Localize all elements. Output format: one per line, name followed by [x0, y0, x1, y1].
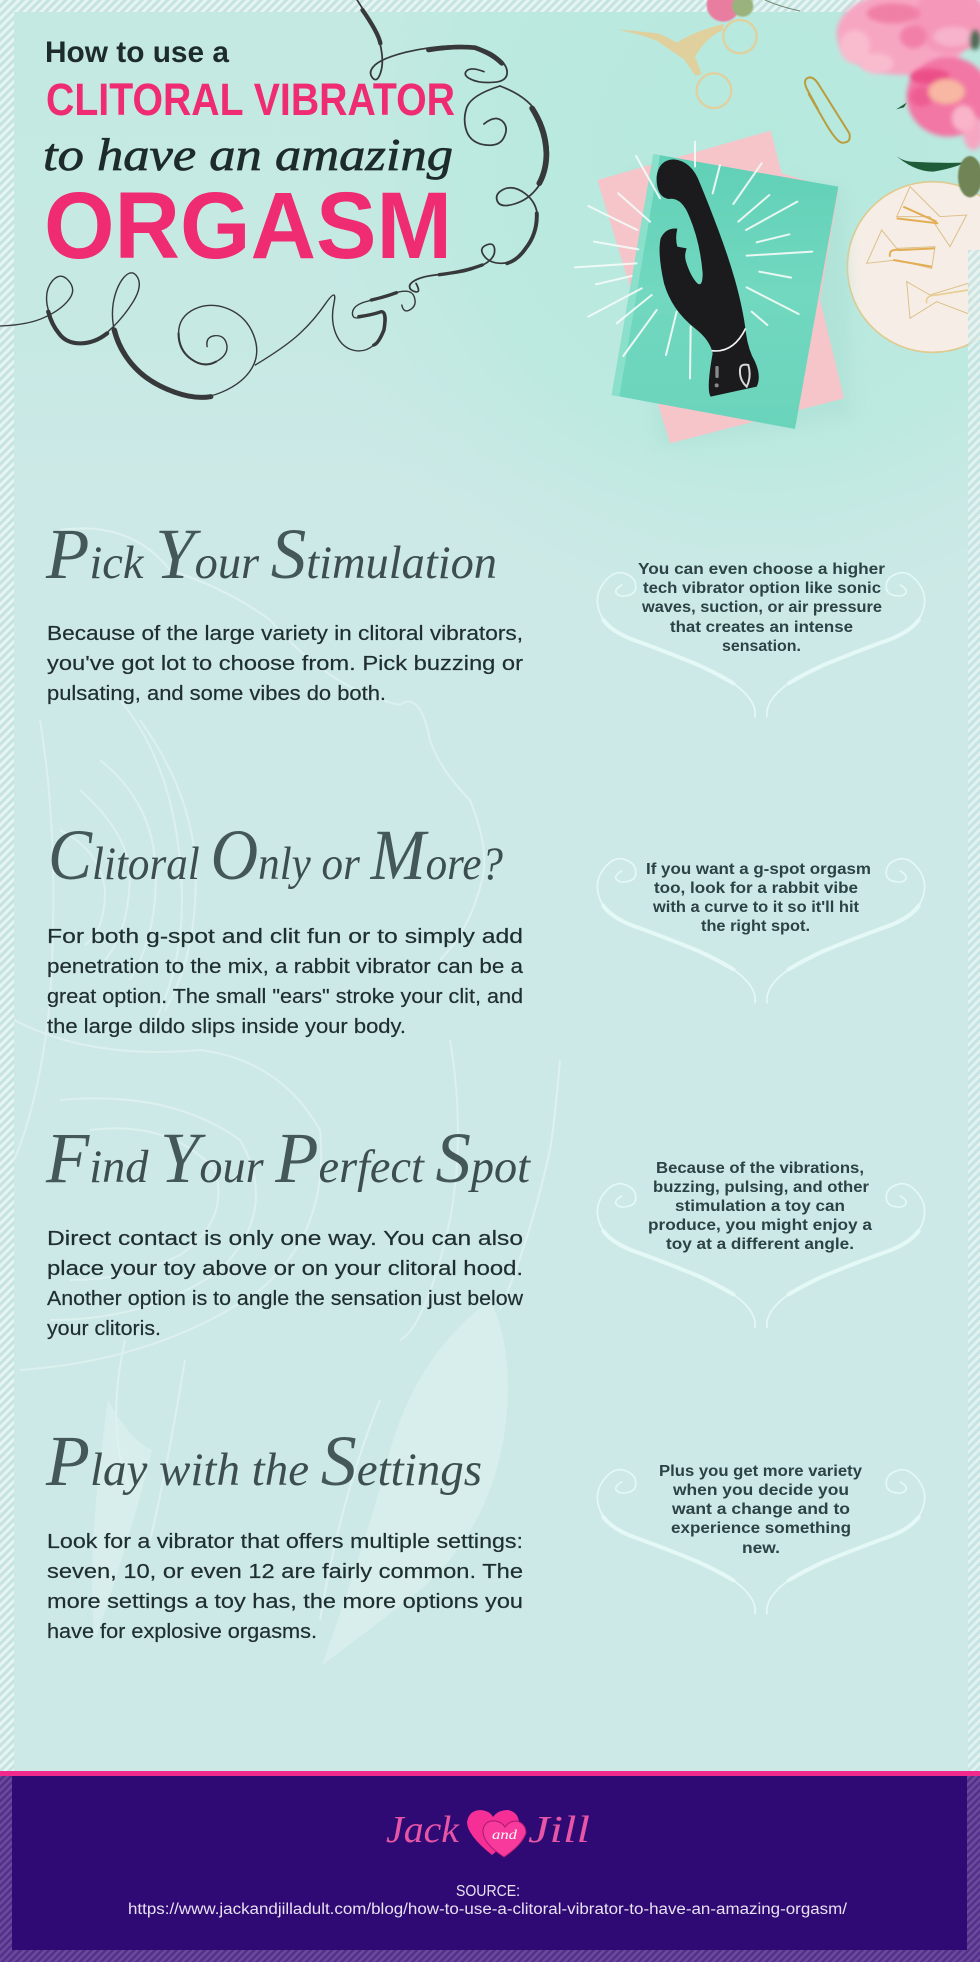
callout 2	[597, 859, 925, 1003]
body text: place your toy above or on your clitoral hood.	[47, 1258, 523, 1280]
body text: Because of the large variety in clitoral vibrators,	[47, 623, 523, 645]
logo hearts	[467, 1810, 519, 1855]
callout text: toy at a different angle.	[666, 1236, 854, 1253]
body text: penetration to the mix, a rabbit vibrator can be a	[47, 956, 524, 978]
section 2: clitoral only or more	[47, 815, 524, 1038]
callout text: too, look for a rabbit vibe	[654, 880, 858, 897]
body text: Direct contact is only one way. You can also	[47, 1228, 523, 1250]
callout text: stimulation a toy can	[675, 1198, 845, 1215]
heart swirl	[597, 1470, 925, 1614]
callout text: new.	[742, 1540, 780, 1557]
body text	[47, 926, 524, 1038]
source url: https://www.jackandjilladult.com/blog/how-to-use-a-clitoral-vibrator-to-have-an-amazing-orgasm/	[128, 1901, 848, 1918]
scissors	[617, 20, 757, 108]
section 3: find your perfect spot	[45, 1118, 531, 1340]
body text	[47, 1228, 524, 1340]
callout text: experience something	[671, 1520, 851, 1537]
body text: more settings a toy has, the more options you	[47, 1591, 523, 1613]
book soft shadow	[627, 167, 853, 447]
body text: the large dildo slips inside your body.	[47, 1016, 406, 1038]
callout text: when you decide you	[672, 1482, 849, 1499]
teal notebook	[612, 154, 838, 429]
title swirl flourish	[0, 0, 548, 397]
heading: Play with the Settings	[45, 1421, 482, 1501]
paper clip	[805, 77, 850, 143]
logo: jack and jill: Jack	[386, 1809, 460, 1851]
decorative hatch borders	[0, 0, 980, 12]
callout text: the right spot.	[701, 918, 810, 935]
flower bud top	[707, 0, 800, 22]
body text: great option. The small "ears" stroke your clit, and	[47, 986, 523, 1008]
callout text	[648, 1160, 872, 1253]
callout text	[638, 561, 885, 655]
plate with binder clips	[847, 182, 980, 352]
pink notebook	[597, 131, 844, 443]
binder clips	[867, 187, 972, 318]
heart swirl	[597, 859, 925, 1003]
callout text	[646, 861, 871, 935]
body text: Look for a vibrator that offers multiple settings:	[47, 1531, 523, 1553]
callout text: produce, you might enjoy a	[648, 1217, 872, 1234]
title	[43, 36, 455, 279]
callout text: tech vibrator option like sonic	[643, 580, 881, 597]
heart swirl	[597, 573, 925, 717]
source label: SOURCE:	[456, 1883, 520, 1900]
watermark leg shapes	[92, 1300, 508, 1665]
body text: have for explosive orgasms.	[47, 1621, 317, 1643]
logo: jack and jill	[386, 1809, 590, 1857]
callout text: with a curve to it so it'll hit	[652, 899, 860, 916]
callout text: Plus you get more variety	[659, 1463, 862, 1480]
peony flowers	[837, 0, 980, 150]
callout text: waves, suction, or air pressure	[641, 599, 882, 616]
callout text: Because of the vibrations,	[656, 1160, 864, 1177]
title line: to have an amazing: to have an amazing	[43, 129, 453, 180]
photo: notebooks, scissors, flowers and vibrator	[575, 0, 980, 447]
title line: clitoral vibrator: CLITORAL VIBRATOR	[46, 74, 455, 125]
heading: Find Your Perfect Spot	[45, 1118, 531, 1198]
heading: Pick Your Stimulation	[45, 514, 497, 594]
callout 1	[597, 561, 925, 717]
body text	[47, 623, 523, 705]
callout 4	[597, 1463, 925, 1614]
heart swirl	[597, 1184, 925, 1328]
vibrator	[657, 159, 759, 397]
body text	[47, 1531, 523, 1643]
body text: seven, 10, or even 12 are fairly common. The	[47, 1561, 523, 1583]
body text: Another option is to angle the sensation just below	[47, 1288, 524, 1310]
title line: how to use a: How to use a	[45, 36, 229, 69]
callout text: want a change and to	[671, 1501, 850, 1518]
callout text: If you want a g-spot orgasm	[646, 861, 871, 878]
logo: jack and jill: and	[492, 1828, 518, 1843]
logo: jack and jill: Jill	[528, 1809, 590, 1851]
callout text	[659, 1463, 862, 1557]
body text: For both g-spot and clit fun or to simply add	[47, 926, 523, 948]
watermark figure illustration	[14, 528, 560, 1620]
body text: you've got lot to choose from. Pick buzzing or	[47, 653, 523, 675]
callout text: You can even choose a higher	[638, 561, 885, 578]
body text: pulsating, and some vibes do both.	[47, 683, 386, 705]
photo: desk flat lay	[847, 182, 980, 352]
leaf and bud	[893, 153, 980, 197]
callout text: buzzing, pulsing, and other	[653, 1179, 869, 1196]
body text: your clitoris.	[47, 1318, 161, 1340]
photo background tint	[260, 0, 980, 640]
footer band	[0, 1771, 980, 1962]
heading: Clitoral Only or More?	[48, 815, 503, 895]
callout text: that creates an intense	[670, 619, 853, 636]
title line: orgasm: ORGASM	[44, 173, 452, 279]
section 1: pick your stimulation	[45, 514, 523, 705]
callout 3	[597, 1160, 925, 1328]
callout text: sensation.	[722, 638, 801, 655]
section 4: play with the settings	[45, 1421, 523, 1643]
sparkle rays	[575, 142, 812, 378]
